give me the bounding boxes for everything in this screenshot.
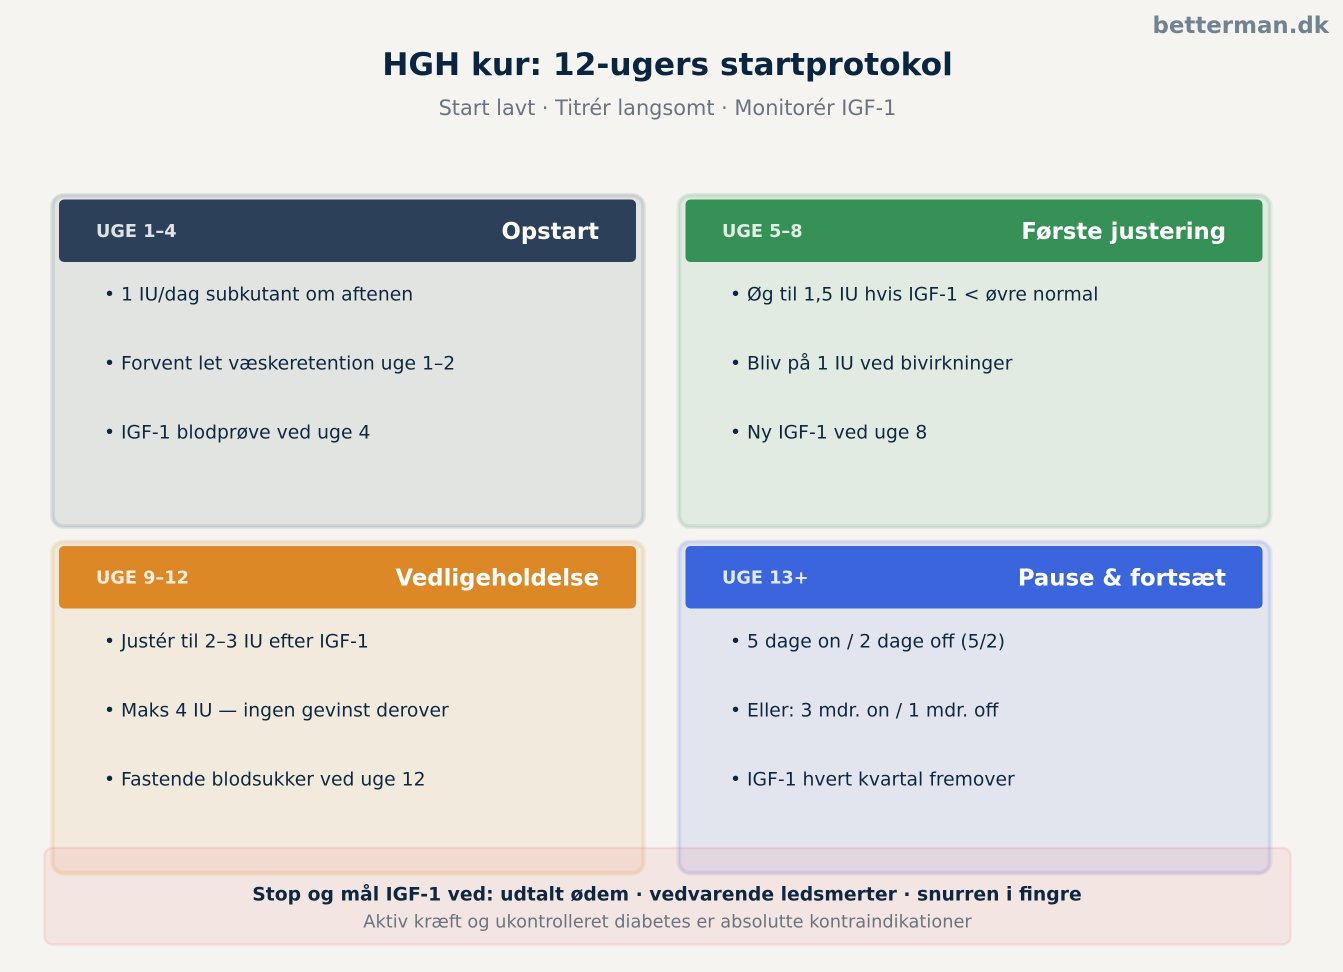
list: uge 5-8 items: • Ny IGF-1 ved uge 8	[730, 422, 927, 443]
callout: stop warning	[44, 848, 1290, 944]
header: uge 1-4: Opstart	[502, 219, 599, 245]
panel: uge 1-4 opstart	[52, 195, 644, 527]
list: uge 5-8 items	[730, 284, 1099, 443]
panel: uge 5-8 første justering	[679, 195, 1270, 527]
callout note: Aktiv kræft og ukontrolleret diabetes er absolutte kontraindikationer	[363, 912, 972, 932]
list: uge 1-4 items: • Forvent let væskeretention uge 1–2	[104, 353, 455, 374]
list: uge 1-4 items: • IGF-1 blodprøve ved uge 4	[104, 422, 370, 443]
header: uge 13+: UGE 13+	[722, 568, 809, 588]
callout heading: Stop og mål IGF-1 ved: udtalt ødem · vedvarende ledsmerter · snurren i fingre	[252, 881, 1082, 905]
list: uge 13+ items: • IGF-1 hvert kvartal fremover	[730, 769, 1015, 790]
header: uge 13+	[686, 546, 1262, 608]
subtitle: Start lavt · Titrér langsomt · Monitorér IGF-1	[439, 96, 896, 120]
list: uge 13+ items: • 5 dage on / 2 dage off (5/2)	[730, 631, 1005, 652]
header: uge 5-8	[686, 200, 1262, 262]
watermark: betterman.dk: betterman.dk	[1152, 13, 1330, 39]
header: uge 5-8: Første justering	[1021, 219, 1226, 245]
list: uge 1-4 items: • 1 IU/dag subkutant om aftenen	[104, 284, 413, 305]
list: uge 5-8 items: • Bliv på 1 IU ved bivirkninger	[730, 351, 1013, 374]
list: uge 1-4 items	[104, 284, 455, 443]
list: uge 13+ items: • Eller: 3 mdr. on / 1 mdr. off	[730, 700, 999, 721]
title: HGH kur: 12-ugers startprotokol	[382, 47, 953, 83]
list: uge 13+ items	[730, 631, 1015, 790]
list: uge 9-12 items: • Maks 4 IU — ingen gevinst derover	[104, 700, 449, 721]
header: uge 9-12: UGE 9–12	[96, 568, 189, 588]
list: uge 9-12 items: • Justér til 2–3 IU efter IGF-1	[104, 631, 369, 652]
panel: uge 13+ pause og fortsæt	[679, 542, 1270, 874]
list: uge 9-12 items: • Fastende blodsukker ved uge 12	[104, 769, 426, 790]
header: uge 13+: Pause & fortsæt	[1018, 566, 1226, 592]
header: uge 5-8: UGE 5–8	[722, 222, 803, 242]
list: uge 9-12 items	[104, 631, 449, 790]
list: uge 5-8 items: • Øg til 1,5 IU hvis IGF-1 < øvre normal	[730, 284, 1099, 305]
panel: uge 9-12 vedligeholdelse	[52, 542, 644, 874]
header: uge 1-4: UGE 1–4	[96, 222, 177, 242]
header: uge 9-12: Vedligeholdelse	[396, 566, 599, 592]
header: uge 1-4	[59, 200, 636, 262]
header: uge 9-12	[59, 546, 636, 608]
